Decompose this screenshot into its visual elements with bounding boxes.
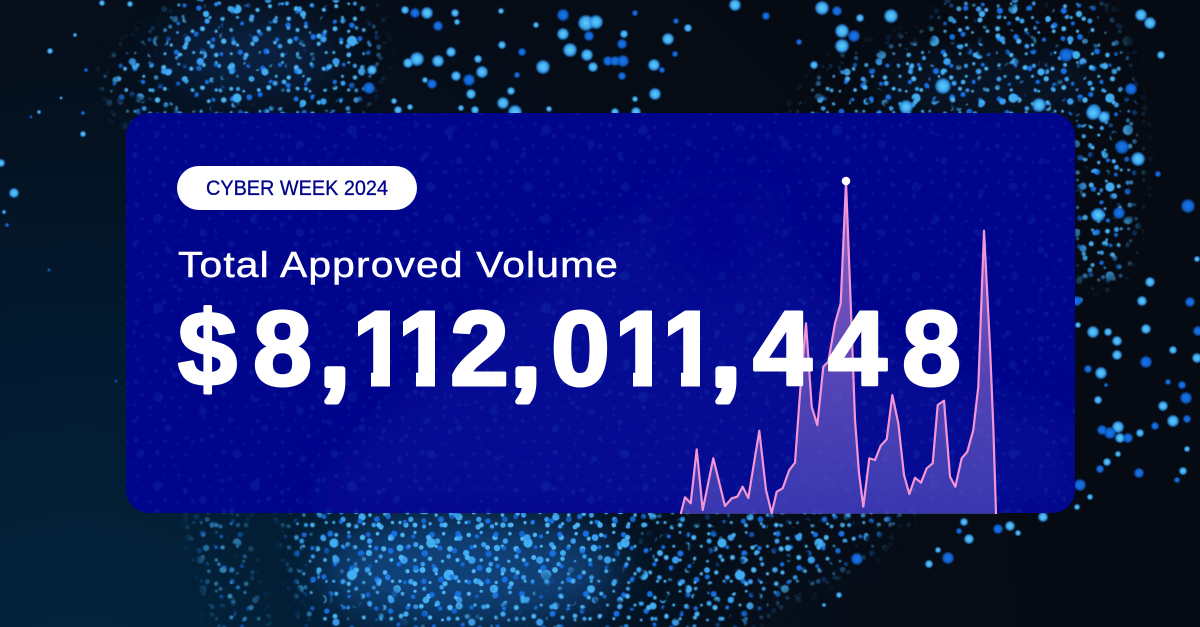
headline number: total volume: 2 (450, 290, 509, 408)
panel: main card (126, 113, 1075, 514)
badge: Cyber Week 2024 (177, 166, 417, 210)
headline number: total volume: 448 (753, 290, 961, 408)
headline number: total volume: , (711, 290, 740, 408)
chart: volume area line (681, 177, 996, 514)
headline number: total volume: 1 (350, 290, 409, 408)
headline number: total volume: , (511, 290, 540, 408)
headline number: total volume: 1 (395, 290, 454, 408)
badge: Cyber Week 2024: CYBER WEEK 2024 (206, 177, 388, 200)
headline number: total volume: 1 (660, 290, 719, 408)
heading: Total Approved Volume: Total Approved Volume (178, 244, 619, 285)
headline number: total volume: , (320, 290, 349, 408)
headline number: total volume: 1 (612, 290, 671, 408)
headline number: total volume: 0 (551, 290, 610, 408)
headline number: total volume (178, 305, 960, 404)
headline number: total volume: $8 (178, 290, 312, 408)
